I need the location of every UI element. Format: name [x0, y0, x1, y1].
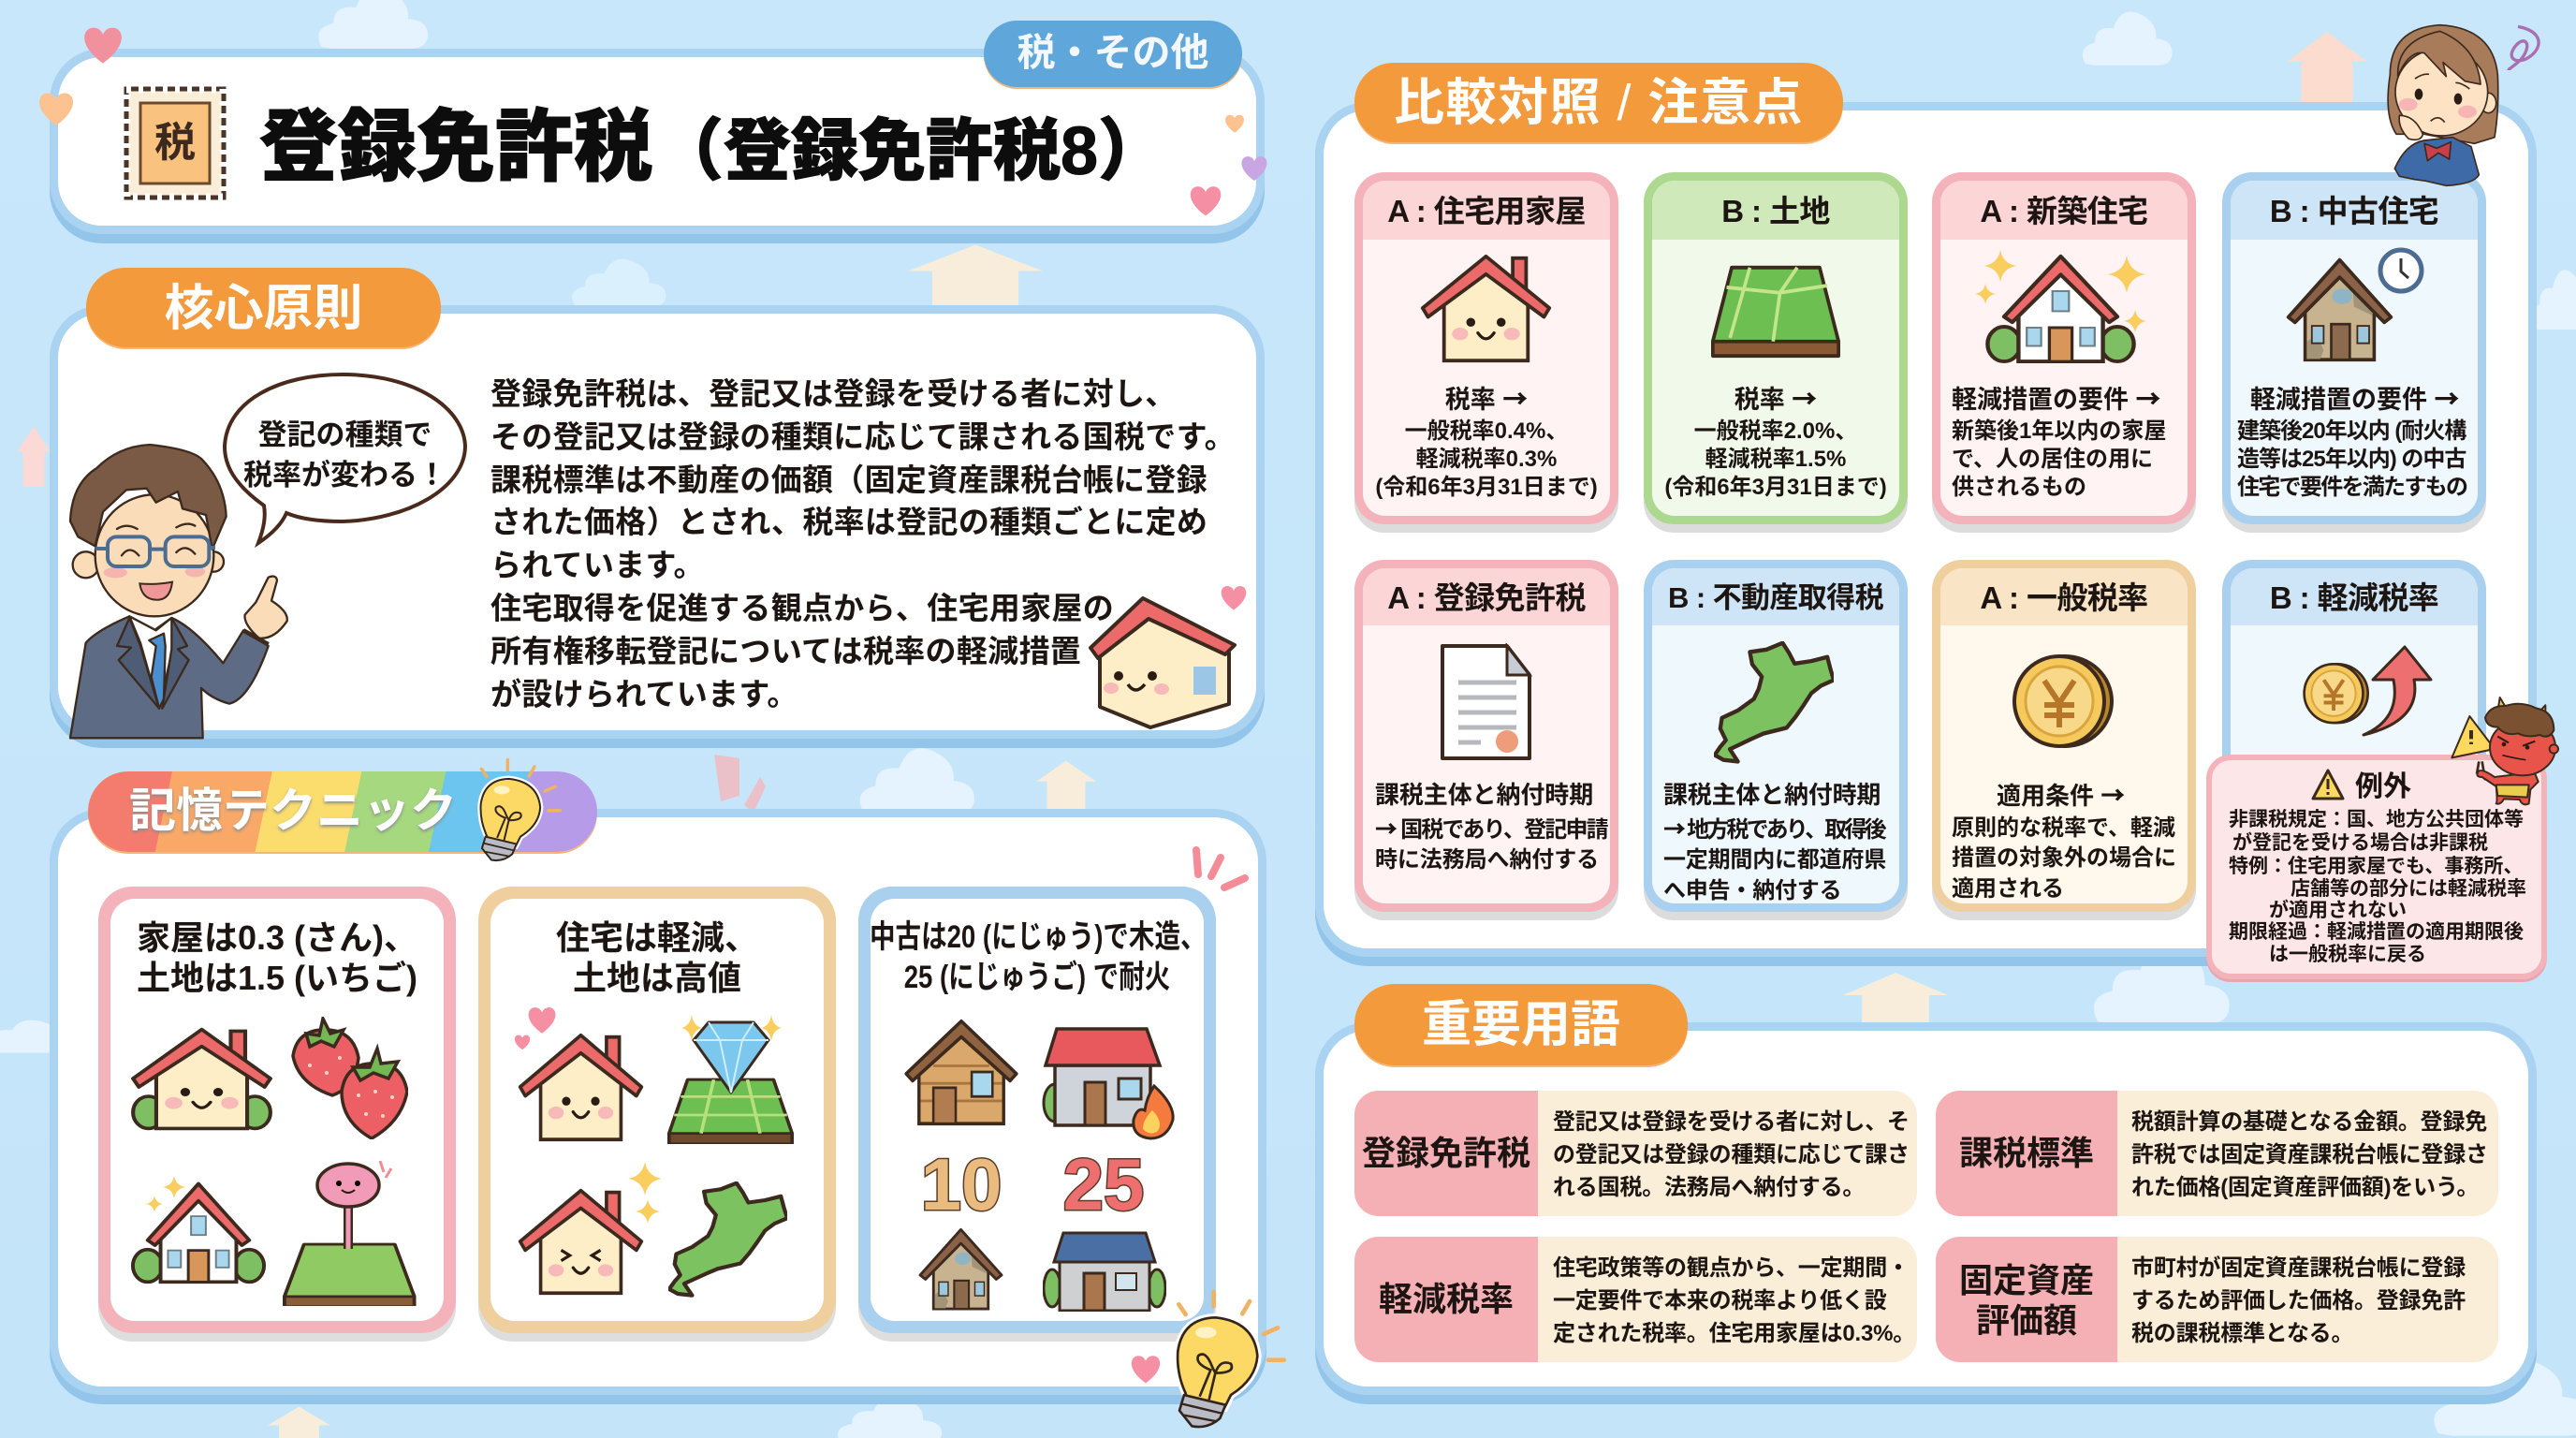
icon: lightbulb sparks — [1193, 846, 1249, 891]
heading: memory technique rainbow tag: 記憶テクニック — [129, 785, 457, 837]
term definition: 許税では固定資産課税台帳に登録さ — [2131, 1142, 2488, 1167]
icon: sparkles — [1975, 250, 2146, 332]
callout text: 非課税規定：国、地方公共団体等 — [2229, 809, 2524, 830]
card header — [2231, 181, 2478, 240]
card header — [1652, 568, 1899, 625]
card text: 新築後1年以内の家屋 — [1952, 418, 2166, 444]
card text: 建築後20年以内 (耐火構 — [2237, 418, 2466, 444]
card text: 供されるもの — [1952, 475, 2086, 500]
icon: sparkles near new house — [146, 1176, 185, 1212]
icon: lightbulb on heading — [477, 758, 562, 861]
mnemonic text: 25 (にじゅうご) で耐火 — [904, 960, 1170, 995]
callout text: が登記を受ける場合は非課税 — [2232, 832, 2488, 854]
card text: 時に法務局へ納付する — [1375, 847, 1599, 873]
card header: A : 住宅用家屋 — [1387, 194, 1586, 228]
card: reduced rate — [2222, 560, 2486, 912]
callout text: 店舗等の部分には軽減税率 — [2291, 878, 2526, 900]
card text: 軽減措置の要件 → — [1952, 379, 2161, 416]
card header: A : 新築住宅 — [1980, 194, 2148, 228]
card body — [2231, 181, 2478, 516]
panel: core principle — [50, 305, 1265, 739]
term label: 課税標準 — [1959, 1134, 2094, 1172]
card text: → 国税であり、登記申請 — [1375, 811, 1607, 843]
icon: fireproof house with flame — [1043, 1027, 1175, 1140]
text block: core principle body: その登記又は登録の種類に応じて課される国税です。 — [490, 419, 1236, 454]
card text: 措置の対象外の場合に — [1952, 845, 2176, 871]
bubble text: 税率が変わる！ — [243, 459, 446, 492]
panel: key terms — [1315, 1022, 2537, 1395]
icon: up arrow — [2360, 644, 2434, 737]
card text: 税率 → — [1734, 379, 1817, 416]
mnemonic text — [870, 919, 1207, 995]
term: assessed value — [1936, 1237, 2498, 1362]
card body — [2231, 568, 2478, 903]
icon: pin on land — [283, 1161, 416, 1306]
card: new house — [1932, 172, 2196, 524]
mnemonic text: 住宅は軽減、 — [556, 918, 758, 957]
icon: sparkles near house — [628, 1162, 662, 1224]
icon: worried student — [2368, 9, 2555, 197]
card: mnemonic 1 — [98, 887, 456, 1333]
bubble text — [243, 418, 446, 492]
term label: 軽減税率 — [1379, 1280, 1514, 1318]
card body — [1363, 181, 1610, 516]
icon: blue-roofed old house — [1043, 1232, 1166, 1312]
card: used house — [2222, 172, 2486, 524]
card text — [1664, 379, 1887, 500]
badge: category tag: 税・その他 — [1017, 31, 1209, 74]
card body — [1940, 181, 2188, 516]
text block: core principle body: 課税標準は不動産の価額（固定資産課税台帳に登録 — [490, 462, 1208, 497]
card: general rate — [1932, 560, 2196, 912]
heading: comparison — [1354, 63, 1843, 142]
card header: A : 登録免許税 — [1387, 580, 1586, 615]
icon: house with closed eyes — [519, 1189, 644, 1296]
mnemonic text — [556, 918, 758, 997]
term label — [1354, 1237, 1538, 1362]
heading: core principle — [86, 268, 441, 347]
icon: strawberries — [291, 1017, 408, 1139]
icon: house with hearts — [519, 1034, 644, 1142]
card text: 住宅で要件を満たすもの — [2237, 475, 2466, 500]
icon: small yen coin — [2302, 660, 2369, 727]
card header — [1940, 181, 2188, 240]
card text — [1663, 778, 1886, 906]
card body — [1363, 568, 1610, 903]
decorative hearts around title — [39, 28, 1267, 215]
term definition — [2131, 1106, 2488, 1204]
term definition — [2131, 1252, 2466, 1350]
panel: title — [50, 49, 1265, 234]
icon: document — [1440, 643, 1532, 761]
term: reduced rate — [1354, 1237, 1917, 1362]
term definition: 税の課税標準となる。 — [2131, 1321, 2353, 1346]
mnemonic text: 家屋は0.3 (さん)、 — [137, 918, 417, 957]
term definition: 市町村が固定資産課税台帳に登録 — [2131, 1255, 2466, 1281]
card: acquisition tax — [1644, 560, 1908, 912]
card text: へ申告・納付する — [1663, 878, 1841, 902]
card text: 課税主体と納付時期 — [1663, 781, 1881, 809]
card text — [2237, 380, 2466, 502]
card body — [871, 899, 1204, 1321]
card text: 一般税率2.0%、 — [1694, 418, 1857, 444]
card text — [1375, 778, 1607, 876]
term label: 固定資産 — [1959, 1261, 2094, 1299]
callout text: が適用されない — [2269, 900, 2407, 921]
icon: new house — [1985, 255, 2136, 363]
heading: key terms: 重要用語 — [1422, 997, 1620, 1052]
card: mnemonic 3 — [858, 887, 1216, 1333]
text block: core principle body: された価格）とされ、税率は登記の種類ごとに定め — [490, 505, 1208, 539]
callout heading: 例外 — [2355, 771, 2411, 802]
text block: core principle body: 登録免許税は、登記又は登録を受ける者に対し、 — [490, 376, 1177, 411]
card text: 税率 → — [1445, 379, 1528, 416]
term definition: れる国税。法務局へ納付する。 — [1553, 1175, 1865, 1200]
term definition: 税額計算の基礎となる金額。登録免 — [2131, 1109, 2487, 1135]
icon: warning triangle — [2311, 769, 2345, 800]
icon: yen coin — [2011, 653, 2114, 751]
term label — [1936, 1237, 2117, 1362]
term definition: 住宅政策等の観点から、一定期間・ — [1553, 1255, 1910, 1281]
heading: core principle: 核心原則 — [165, 281, 363, 336]
bubble text: 登記の種類で — [258, 418, 432, 451]
title: 登録免許税（登録免許税8） — [259, 103, 1165, 191]
card text — [1952, 380, 2166, 502]
card: mnemonic 2 — [478, 887, 836, 1333]
icon: tax stamp: 税 — [154, 120, 196, 166]
callout text — [2212, 760, 2541, 974]
icon: new house with sparkles — [131, 1181, 266, 1284]
icon: house with bushes — [131, 1028, 272, 1131]
card header — [1940, 568, 2188, 625]
icon: diamond sparkles — [681, 1015, 782, 1041]
icon: land plot — [1711, 266, 1840, 358]
icon: clock — [2378, 247, 2424, 294]
card header: B : 中古住宅 — [2270, 194, 2438, 228]
card text: (令和6年3月31日まで) — [1664, 475, 1887, 500]
card text: 軽減税率0.3% — [1416, 447, 1557, 472]
term label — [1936, 1091, 2117, 1216]
term: registration tax — [1354, 1091, 1917, 1216]
card text: 軽減措置の要件 → — [2250, 379, 2460, 416]
term definition — [1553, 1252, 1915, 1350]
card body — [1652, 181, 1899, 516]
icon: house — [1421, 255, 1552, 363]
card header: B : 不動産取得税 — [1668, 581, 1883, 614]
icon: old house — [2276, 255, 2403, 363]
heading: comparison: 比較対照 / 注意点 — [1394, 75, 1804, 131]
card header: A : 一般税率 — [1980, 580, 2148, 615]
card text: 原則的な税率で、軽減 — [1952, 814, 2175, 841]
mnemonic text: 中古は20 (にじゅう)で木造、 — [870, 919, 1207, 955]
card header — [1363, 181, 1610, 240]
term definition — [1553, 1106, 1910, 1204]
text block: core principle body: られています。 — [490, 548, 705, 582]
icon: teacher character — [69, 444, 288, 740]
icon: tax stamp — [124, 86, 227, 200]
heading: memory technique rainbow tag — [88, 771, 597, 852]
card: residential building — [1354, 172, 1618, 524]
callout text: 期限経過：軽減措置の適用期限後 — [2229, 921, 2524, 943]
icon: smiling house — [1089, 596, 1237, 729]
callout text: は一般税率に戻る — [2269, 944, 2426, 965]
icon: lightbulb corner — [1176, 1290, 1286, 1429]
panel: memory techniques — [50, 809, 1266, 1395]
card text: 適用条件 → — [1997, 777, 2125, 812]
icon: land with diamond — [667, 1020, 794, 1144]
mnemonic text: 土地は1.5 (いちご) — [137, 959, 417, 997]
card text: 造等は25年以内) の中古 — [2237, 447, 2466, 472]
card: registration tax — [1354, 560, 1618, 912]
term label — [1354, 1091, 1538, 1216]
text block: core principle body: 所有権移転登記については税率の軽減措置 — [490, 634, 1081, 668]
card text: 軽減税率1.5% — [1705, 447, 1846, 472]
text block: core principle body — [490, 376, 1236, 712]
callout: exceptions — [2206, 755, 2547, 979]
callout text: 特例：住宅用家屋でも、事務所、 — [2229, 856, 2523, 877]
icon: heart near lightbulb — [1131, 1356, 1161, 1384]
card header: B : 軽減税率 — [2270, 580, 2438, 615]
mnemonic text — [137, 918, 417, 997]
text block: core principle body: が設けられています。 — [490, 677, 798, 712]
speech bubble — [223, 373, 467, 548]
card text: → 地方税であり、取得後 — [1663, 811, 1884, 843]
term definition: の登記又は登録の種類に応じて課さ — [1553, 1142, 1910, 1167]
card text — [1952, 778, 2176, 904]
card header — [1652, 181, 1899, 240]
card body — [490, 899, 824, 1321]
card header — [1363, 568, 1610, 625]
term: tax base — [1936, 1091, 2498, 1216]
text block: core principle body: 住宅取得を促進する観点から、住宅用家屋の — [490, 591, 1114, 625]
card body — [1652, 568, 1899, 903]
icon: heart near house — [1221, 586, 1247, 610]
term label: 登録免許税 — [1362, 1134, 1530, 1172]
card text: 課税主体と納付時期 — [1375, 781, 1593, 809]
card text: 一般税率0.4%、 — [1405, 418, 1568, 444]
badge: category tag — [984, 21, 1242, 87]
icon: wooden house — [904, 1019, 1018, 1125]
card text: 適用される — [1952, 876, 2064, 901]
heading: key terms — [1354, 984, 1688, 1065]
mnemonic text: 土地は高値 — [573, 959, 741, 997]
card header — [2231, 568, 2478, 625]
card text: で、人の居住の用に — [1952, 447, 2153, 472]
card body — [110, 899, 444, 1321]
card text: (令和6年3月31日まで) — [1375, 475, 1598, 500]
term definition: 一定要件で本来の税率より低く設 — [1553, 1288, 1887, 1313]
icon: Japan map — [668, 1181, 787, 1298]
icon: red oni with warning sign — [2434, 683, 2565, 814]
card header: B : 土地 — [1721, 194, 1830, 228]
term label: 評価額 — [1976, 1301, 2077, 1340]
card body — [1940, 568, 2188, 903]
term definition: するため評価した価格。登録免許 — [2131, 1288, 2466, 1313]
term definition: 定された税率。住宅用家屋は0.3%。 — [1553, 1321, 1915, 1346]
icon: Japan map — [1714, 641, 1834, 765]
card text: 一定期間内に都道府県 — [1663, 847, 1886, 873]
icon: old house — [919, 1228, 1003, 1311]
term definition: 登記又は登録を受ける者に対し、そ — [1553, 1109, 1910, 1135]
panel: comparison — [1315, 102, 2537, 957]
term definition: れた価格(固定資産評価額)をいう。 — [2131, 1175, 2479, 1200]
card text — [1375, 379, 1598, 500]
icon: hearts — [515, 1007, 556, 1050]
card: land — [1644, 172, 1908, 524]
